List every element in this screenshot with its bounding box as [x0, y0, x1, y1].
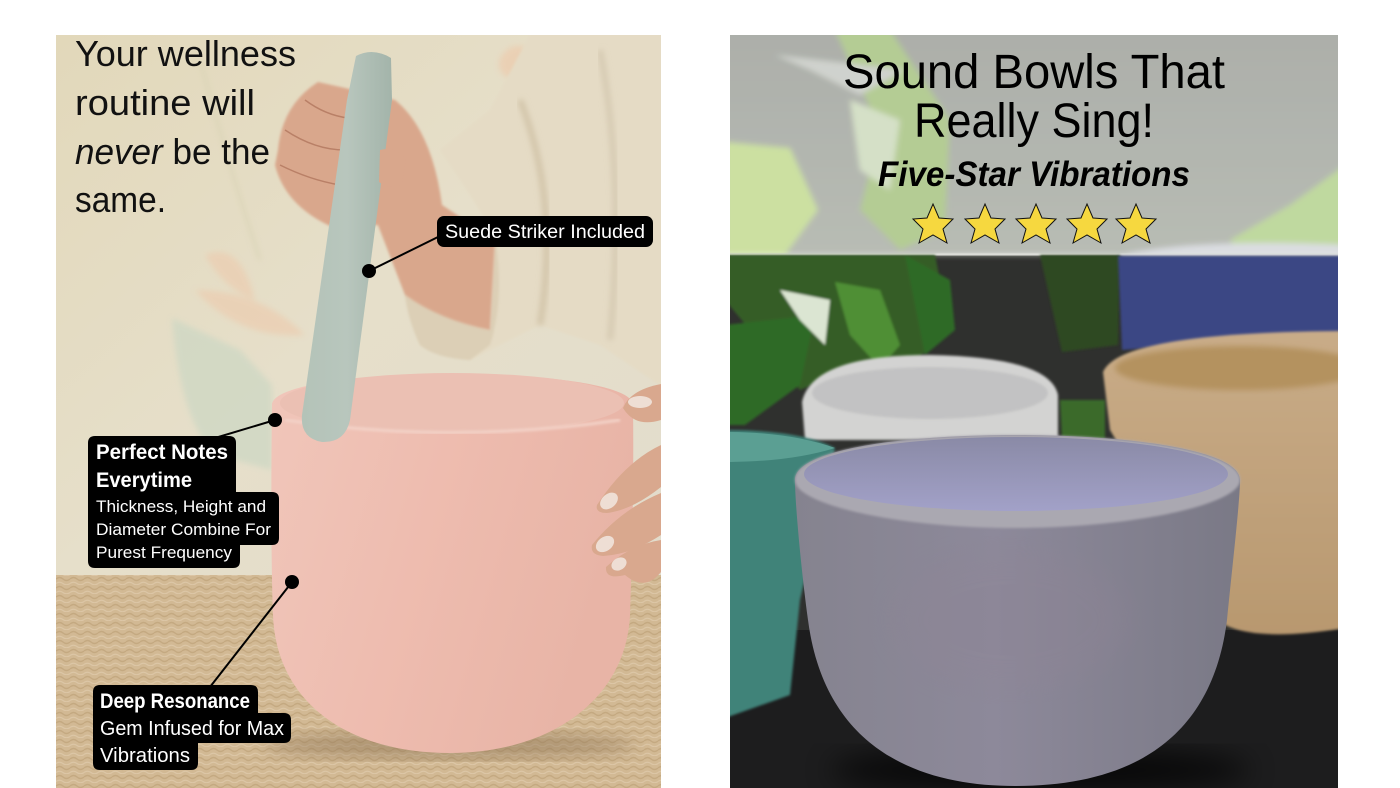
callout: deep resonance: Vibrations	[100, 745, 190, 767]
callout: suede striker: Suede Striker Included	[445, 222, 645, 243]
lavender bowl	[795, 435, 1240, 786]
bowl interior	[356, 373, 624, 425]
top foliage under header	[730, 35, 1338, 260]
white bowl	[802, 355, 1058, 440]
heading: left: same.	[75, 179, 166, 220]
wallpaper flowers	[172, 46, 522, 470]
sleeve	[509, 45, 576, 100]
woven rug	[56, 575, 661, 788]
heading: right: Five-Star Vibrations	[878, 155, 1190, 194]
pink sheen	[890, 550, 1130, 690]
thumb	[379, 149, 386, 184]
callout: suede striker	[362, 216, 653, 278]
heading: right: Really Sing!	[914, 95, 1154, 148]
callout: perfect notes: Perfect Notes	[96, 441, 228, 464]
dark background	[730, 255, 1338, 630]
callout: perfect notes: Everytime	[96, 469, 192, 492]
callout: perfect notes: Diameter Combine For	[96, 520, 271, 539]
arm and hand	[275, 82, 495, 330]
right hand fingers	[592, 384, 661, 583]
bowl inner	[795, 435, 1240, 528]
heading: right: Sound Bowls That	[843, 46, 1225, 99]
callout: perfect notes	[88, 413, 282, 568]
translucent header highlight	[730, 35, 1338, 255]
callout: deep resonance: Deep Resonance	[100, 690, 250, 713]
heading: left: never be the	[75, 131, 270, 172]
bowl shadow	[265, 731, 635, 759]
heading: right	[843, 46, 1225, 194]
finger nails	[593, 396, 652, 573]
callout: perfect notes: Thickness, Height and	[96, 497, 266, 516]
lavender bowl shadow	[830, 748, 1250, 788]
striker	[302, 52, 392, 442]
green leaves	[725, 255, 1120, 440]
heading: left: Your wellness	[75, 33, 296, 74]
heading: left	[75, 33, 296, 220]
callout: deep resonance	[93, 575, 299, 770]
blue bowl	[1118, 256, 1345, 350]
heading: left: routine will	[75, 82, 255, 123]
pink bowl	[271, 374, 633, 753]
panel: left product photo	[56, 25, 670, 788]
callout: deep resonance: Gem Infused for Max	[100, 718, 284, 740]
callout: perfect notes: Purest Frequency	[96, 543, 232, 562]
finger divisions	[280, 100, 348, 185]
teal bowl	[725, 430, 835, 718]
panel: right product photo	[730, 35, 1338, 788]
tan bowl	[1103, 331, 1365, 634]
five star rating	[913, 204, 1156, 243]
